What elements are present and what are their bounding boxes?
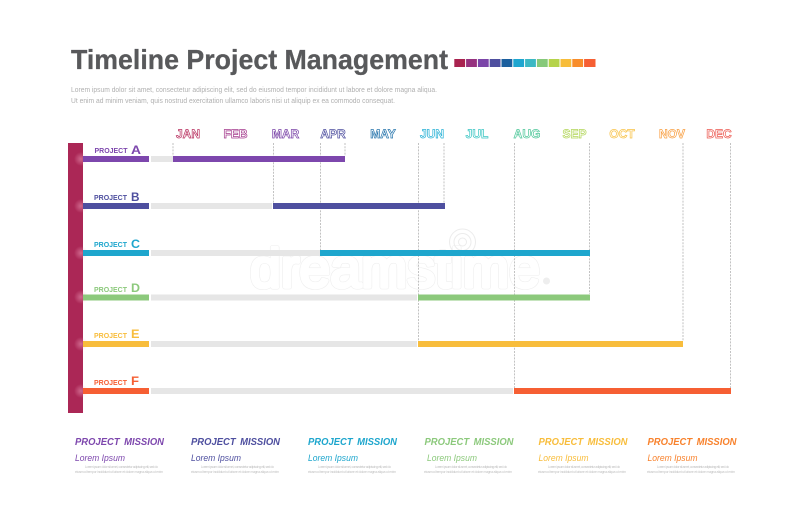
month headers: DEC bbox=[706, 127, 732, 141]
mission block: E bbox=[538, 437, 628, 474]
mission block: E: Lorem ipsum dolor sit amet, consectetur adipiscing elit, sed do bbox=[548, 465, 620, 469]
mission block: B: Lorem ipsum dolor sit amet, consectetur adipiscing elit, sed do bbox=[201, 465, 274, 469]
watermark: dreamstime bbox=[250, 237, 540, 299]
intro text: Ut enim ad minim veniam, quis nostrud exercitation ullamco laboris nisi ut aliquip ex ea commodo consequat. bbox=[71, 96, 395, 105]
mission block: F: Lorem ipsum dolor sit amet, consectetur adipiscing elit, sed do bbox=[657, 465, 729, 469]
month headers: JAN bbox=[176, 127, 200, 141]
mission block: D: PROJECT MISSION bbox=[424, 437, 514, 448]
mission block: E: eiusmod tempor incididunt ut labore et dolore magna aliqua ut enim bbox=[538, 470, 626, 474]
month guide lines bbox=[173, 143, 730, 388]
mission block: C: Lorem Ipsum bbox=[308, 453, 358, 463]
mission block: A bbox=[75, 437, 165, 474]
month headers: JUL bbox=[466, 127, 488, 141]
mission block: A: Lorem Ipsum bbox=[75, 453, 125, 463]
project F row bbox=[83, 374, 731, 394]
month headers bbox=[176, 127, 732, 141]
mission block: C: PROJECT MISSION bbox=[308, 437, 398, 448]
mission block: D: Lorem Ipsum bbox=[427, 453, 477, 463]
project C row: PROJECT bbox=[94, 240, 128, 249]
mission block: F: eiusmod tempor incididunt ut labore et dolore magna aliqua ut enim bbox=[647, 470, 735, 474]
month headers: JUN bbox=[420, 127, 444, 141]
watermark: dreamstime bbox=[250, 237, 540, 299]
project D row: PROJECT bbox=[94, 285, 128, 294]
project A row: PROJECT bbox=[94, 146, 128, 155]
mission block: F: Lorem Ipsum bbox=[648, 453, 698, 463]
month headers: AUG bbox=[514, 127, 540, 141]
colour swatch strip bbox=[454, 59, 596, 67]
project F row: PROJECT bbox=[94, 378, 128, 387]
mission block: C bbox=[308, 437, 398, 474]
mission block: F: PROJECT MISSION bbox=[648, 437, 737, 448]
mission block: D: Lorem ipsum dolor sit amet, consectetur adipiscing elit, sed do bbox=[435, 465, 507, 469]
project B row: B bbox=[131, 190, 140, 204]
mission block: B bbox=[191, 437, 281, 474]
mission block: A: eiusmod tempor incididunt ut labore et dolore magna aliqua ut enim bbox=[75, 470, 163, 474]
mission block: D: eiusmod tempor incididunt ut labore et dolore magna aliqua ut enim bbox=[424, 470, 512, 474]
project E row: E bbox=[131, 327, 140, 341]
project C row bbox=[83, 237, 590, 256]
project B row: PROJECT bbox=[94, 193, 128, 202]
mission block: E: Lorem Ipsum bbox=[538, 453, 589, 463]
project B row bbox=[83, 190, 445, 209]
month headers: MAR bbox=[272, 127, 299, 141]
mission block: D bbox=[424, 437, 514, 474]
month headers: OCT bbox=[609, 127, 635, 141]
mission block: B: eiusmod tempor incididunt ut labore et dolore magna aliqua ut enim bbox=[191, 470, 279, 474]
intro text bbox=[71, 85, 437, 105]
title: Timeline Project Management bbox=[71, 44, 448, 75]
mission block: F bbox=[647, 437, 737, 474]
mission block: B: PROJECT MISSION bbox=[191, 437, 281, 448]
mission block: A: Lorem ipsum dolor sit amet, consectetur adipiscing elit, sed do bbox=[85, 465, 158, 469]
month headers: APR bbox=[320, 127, 346, 141]
project E row: PROJECT bbox=[94, 331, 128, 340]
mission block: A: PROJECT MISSION bbox=[75, 437, 165, 448]
project A row bbox=[83, 143, 345, 162]
project F row: F bbox=[131, 374, 139, 388]
mission block: E: PROJECT MISSION bbox=[538, 437, 628, 448]
intro text: Lorem ipsum dolor sit amet, consectetur adipiscing elit, sed do eiusmod tempor incididunt ut labore et dolore magna aliqua. bbox=[71, 85, 437, 94]
project D row bbox=[83, 281, 590, 300]
month headers: SEP bbox=[562, 127, 587, 141]
mission block: C: Lorem ipsum dolor sit amet, consectetur adipiscing elit, sed do bbox=[318, 465, 391, 469]
month headers: NOV bbox=[659, 127, 685, 141]
month headers: MAY bbox=[370, 127, 396, 141]
month headers: FEB bbox=[224, 127, 248, 141]
project D row: D bbox=[131, 281, 140, 295]
project A row: A bbox=[131, 143, 141, 157]
project C row: C bbox=[131, 237, 140, 251]
project E row bbox=[83, 327, 683, 347]
mission block: C: eiusmod tempor incididunt ut labore et dolore magna aliqua ut enim bbox=[308, 470, 396, 474]
mission block: B: Lorem Ipsum bbox=[191, 453, 241, 463]
vertical axis bar bbox=[68, 143, 88, 413]
